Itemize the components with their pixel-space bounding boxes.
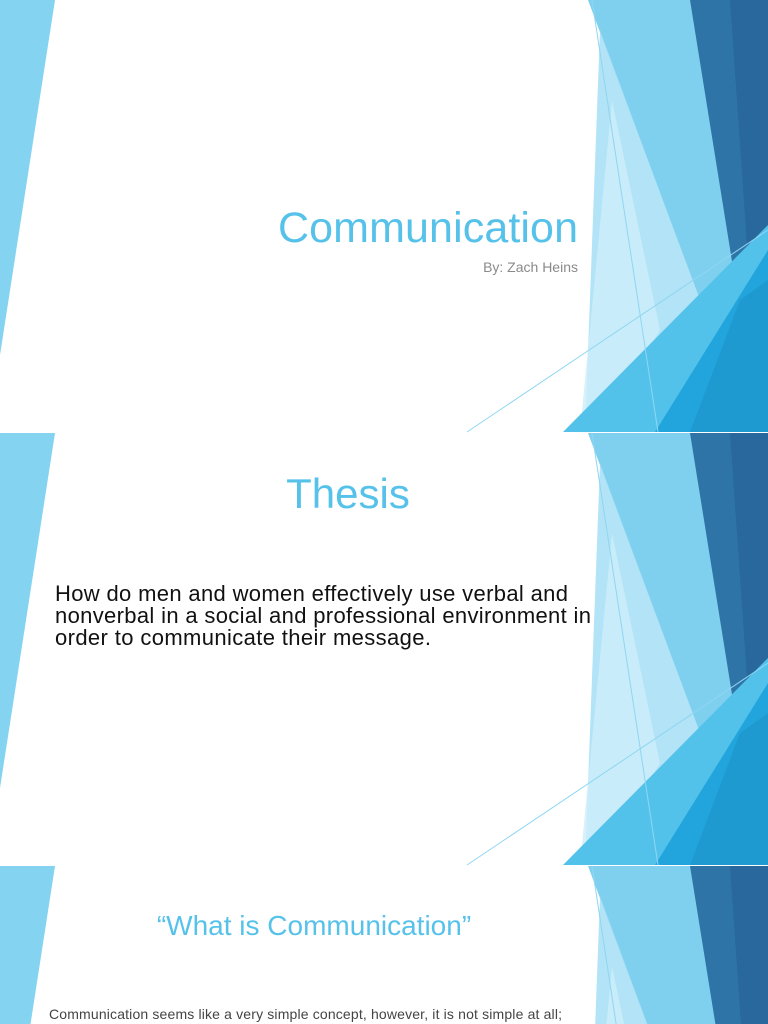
body text: nonverbal in a social and professional environment in	[55, 603, 591, 628]
body text	[55, 581, 591, 650]
title: Communication	[278, 204, 578, 252]
heading: “What is Communication”	[157, 910, 471, 941]
slide 1: title slide	[0, 0, 768, 432]
body text: order to communicate their message.	[55, 625, 431, 650]
body text: Communication seems like a very simple concept, however, it is not simple at all;	[49, 1006, 562, 1022]
slide 2: thesis	[0, 433, 768, 865]
subtitle: author: By: Zach Heins	[483, 259, 578, 275]
heading: Thesis: Thesis	[286, 470, 410, 517]
slide 3: what is communication	[0, 866, 768, 1024]
body text: How do men and women effectively use verbal and	[55, 581, 568, 606]
